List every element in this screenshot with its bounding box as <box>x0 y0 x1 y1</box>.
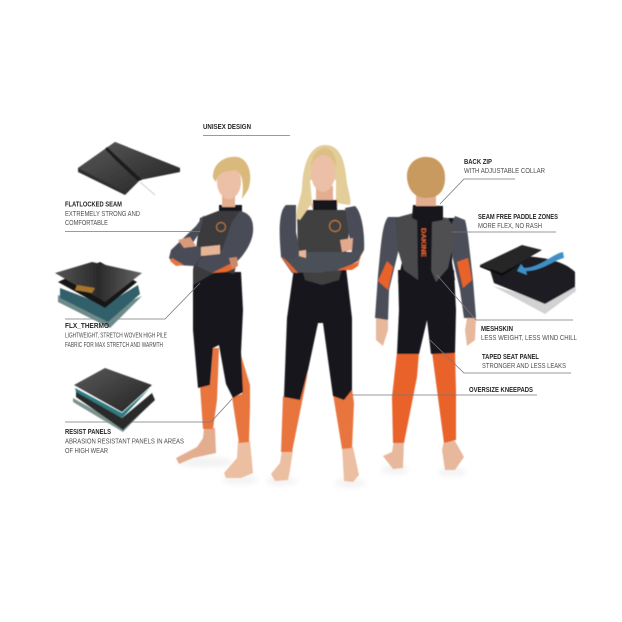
swatch: flatlocked seam <box>78 142 180 195</box>
figure: boy back view <box>375 157 476 476</box>
label: meshskin: MESHSKIN <box>481 326 513 333</box>
swatch: flx thermo layers <box>55 262 142 328</box>
label: resist panels <box>65 429 184 455</box>
label: oversize kneepads: OVERSIZE KNEEPADS <box>469 387 533 394</box>
label: flatlocked seam: EXTREMELY STRONG AND <box>65 211 140 218</box>
label: flx thermo: LIGHTWEIGHT, STRETCH WOVEN HIGH PILE <box>65 332 167 340</box>
label: resist panels: RESIST PANELS <box>65 429 111 436</box>
label: back zip: WITH ADJUSTABLE COLLAR <box>464 168 545 175</box>
label: flx thermo: FLX_THERMO <box>65 323 110 330</box>
label: taped seat panel: STRONGER AND LESS LEAKS <box>482 363 566 370</box>
label: flatlocked seam <box>65 202 140 227</box>
logo text: back of suit: DAKINE <box>420 228 426 258</box>
swatch: seam free paddle zones <box>480 245 576 314</box>
label: flatlocked seam: COMFORTABLE <box>65 220 108 227</box>
label: resist panels: ABRASION RESISTANT PANELS IN AREAS <box>65 438 184 446</box>
label: back zip <box>464 159 545 175</box>
label: seam free paddle zones: SEAM FREE PADDLE ZONES <box>478 214 558 221</box>
label: seam free paddle zones <box>478 214 558 230</box>
label: flx thermo <box>65 323 167 349</box>
label: flx thermo: FABRIC FOR MAX STRETCH AND WARMTH <box>65 342 163 349</box>
label: meshskin <box>481 326 577 342</box>
label: unisex design: UNISEX DESIGN <box>203 124 251 131</box>
label: flatlocked seam: FLATLOCKED SEAM <box>65 202 122 208</box>
label: taped seat panel <box>482 354 566 370</box>
label: seam free paddle zones: MORE FLEX, NO RASH <box>478 223 542 230</box>
label: back zip: BACK ZIP <box>464 159 492 166</box>
callout lines <box>65 136 573 422</box>
figure: boy front view <box>169 157 258 484</box>
swatch: resist panels <box>73 368 155 432</box>
label: resist panels: OF HIGH WEAR <box>65 448 108 455</box>
figure: girl front view <box>265 145 366 487</box>
label: meshskin: LESS WEIGHT, LESS WIND CHILL <box>481 335 577 342</box>
label: taped seat panel: TAPED SEAT PANEL <box>482 354 539 361</box>
